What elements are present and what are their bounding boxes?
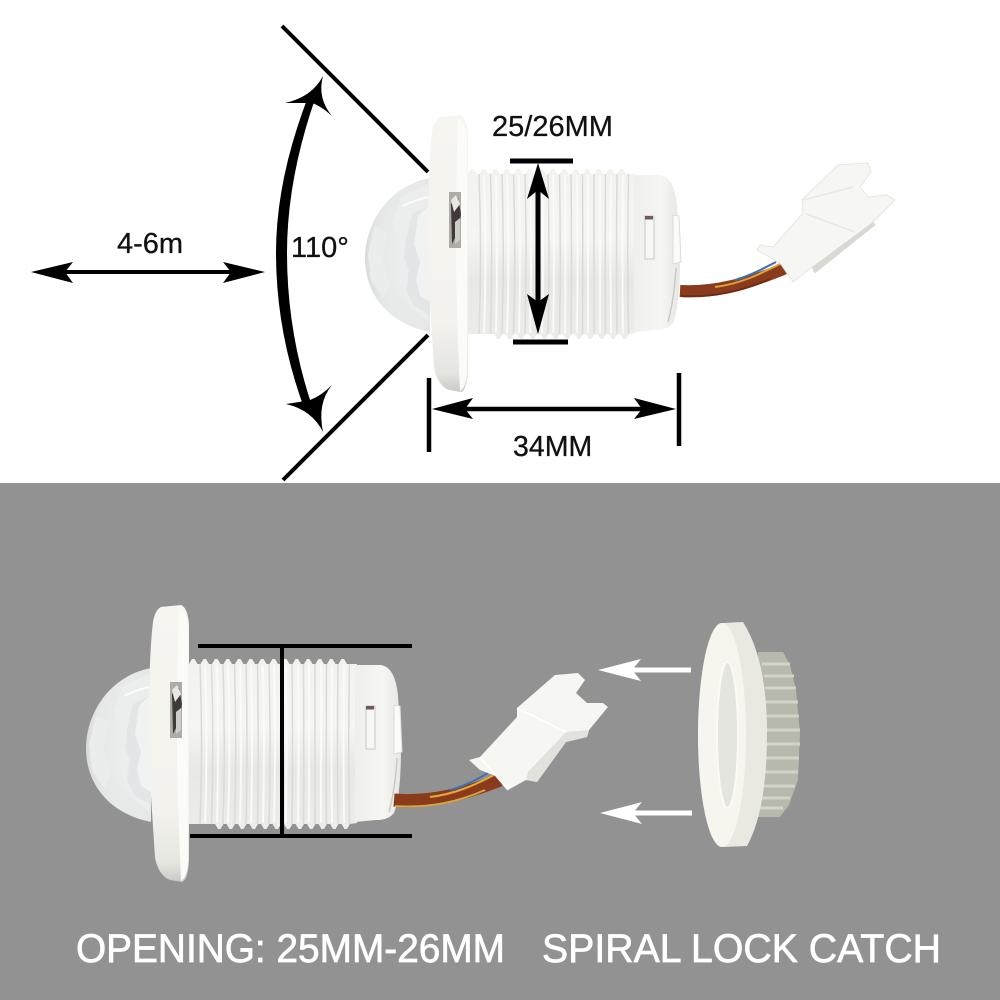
label: 34MM: 34MM	[513, 431, 592, 463]
product photo: sensor installation view	[86, 605, 608, 882]
arrow: 4-6m range	[31, 262, 265, 283]
dimension: 25/26MM vertical arrow	[510, 161, 573, 342]
panel: grey lower area	[0, 483, 1000, 1000]
dimension lines: opening diameter	[190, 646, 412, 836]
label: 110 degrees: 110°	[291, 232, 349, 264]
product photo: sensor with dimensions view	[365, 115, 895, 392]
arrow: upper white arrow	[598, 659, 691, 681]
coverage angle lines	[282, 26, 428, 480]
caption: spiral lock catch: SPIRAL LOCK CATCH	[542, 927, 941, 971]
caption: opening size: OPENING: 25MM-26MM	[76, 927, 505, 971]
arrow: 110 degree double-headed arc	[276, 76, 332, 432]
label: 4-6m: 4-6m	[117, 228, 183, 260]
arrow: lower white arrow	[600, 802, 692, 824]
background: white upper area	[0, 0, 1000, 483]
dimension: 34MM horizontal arrow	[429, 373, 679, 452]
label: 25/26MM: 25/26MM	[492, 111, 613, 143]
product photo: spiral lock ring	[698, 622, 800, 847]
